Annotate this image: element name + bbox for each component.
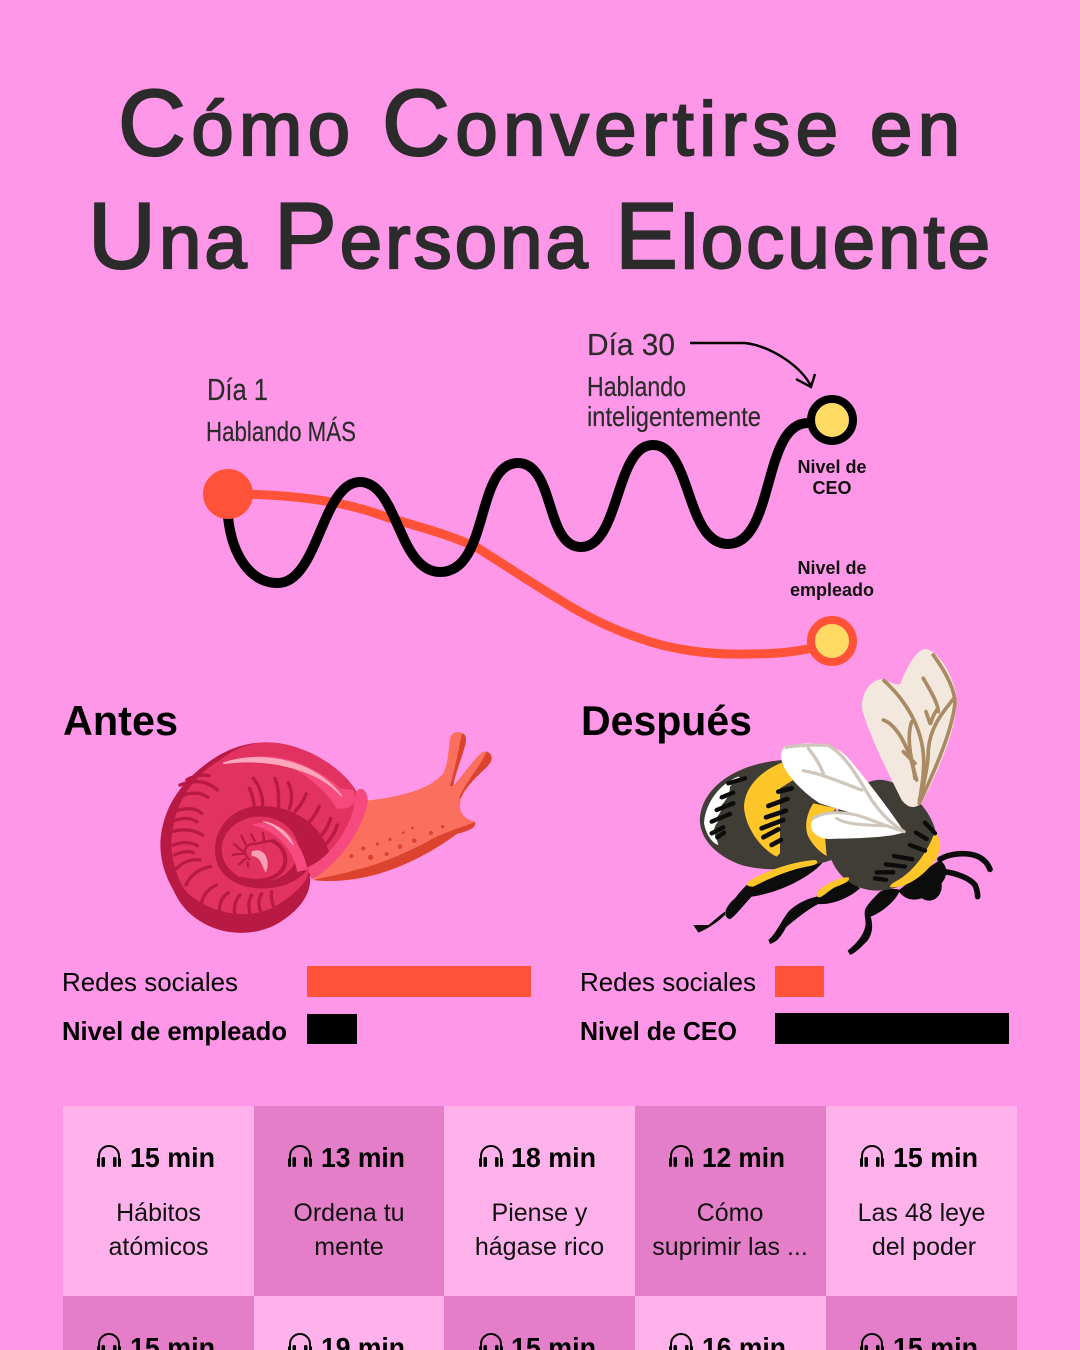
label: day 1: Hablando MÁS (206, 416, 356, 447)
arrow (690, 343, 815, 387)
bee tail marks (704, 777, 740, 845)
card: Cómo suprimir las ...: suprimir las ... (652, 1233, 808, 1261)
label: day 30: Día 30 (587, 327, 675, 362)
card: Ordena tu mente (254, 1106, 444, 1296)
line chart: progress from day 1 to day 30 (203, 343, 853, 662)
before: employee level label: Nivel de empleado (62, 1016, 287, 1046)
card row 2, column 4 (635, 1296, 826, 1350)
card: Ordena tu mente: 13 min (321, 1142, 405, 1173)
card: Cómo suprimir las ...: 12 min (702, 1142, 785, 1173)
card: Las 48 leye del poder (826, 1106, 1017, 1296)
label: employee level: Nivel de (797, 558, 867, 578)
label: employee level (790, 558, 874, 600)
card row 2, column 1 (63, 1296, 254, 1350)
card: Piense y hágase rico: 18 min (511, 1142, 596, 1173)
label: day 30 (587, 327, 761, 432)
label: day 30: Hablando (587, 371, 686, 402)
label: CEO level: CEO (812, 478, 852, 498)
after: social media bar (775, 966, 824, 997)
label: employee level: empleado (790, 580, 874, 600)
card: Las 48 leye del poder: del poder (872, 1233, 976, 1261)
card: Hábitos atómicos: Hábitos (116, 1199, 201, 1227)
before: employee level bar (307, 1014, 357, 1044)
heading: after: Después (581, 697, 752, 744)
title (88, 70, 990, 288)
bee yellow bands (744, 763, 793, 857)
bee back wing (862, 649, 957, 807)
card: Hábitos atómicos: atómicos (108, 1233, 209, 1261)
after: CEO level label: Nivel de CEO (580, 1016, 737, 1046)
card: Cómo suprimir las ... (635, 1106, 826, 1296)
snail body (313, 732, 492, 881)
before: social media bar (307, 966, 531, 997)
CEO level line (228, 423, 808, 583)
card: Ordena tu mente: Ordena tu (293, 1199, 405, 1227)
bee front wing (781, 743, 904, 839)
label: day 30: inteligentemente (587, 401, 761, 432)
snail shell (160, 742, 359, 933)
shell spiral (215, 806, 329, 888)
label: day 1: Día 1 (207, 372, 268, 407)
card: Hábitos atómicos: 15 min (130, 1142, 215, 1173)
card: Ordena tu mente: mente (314, 1233, 384, 1261)
label: CEO level (797, 457, 867, 498)
bee head and antennae (898, 860, 946, 901)
card row 2, column 5 (826, 1296, 1017, 1350)
card: Piense y hágase rico (444, 1106, 635, 1296)
after: CEO level bar (775, 1013, 1009, 1044)
bee thorax (828, 780, 937, 891)
start point (203, 469, 253, 519)
card: Las 48 leye del poder: 15 min (893, 1142, 978, 1173)
card row 2, column 2 (254, 1296, 444, 1350)
heading: before: Antes (63, 697, 178, 744)
icon: snail (160, 732, 492, 933)
employee end point (811, 620, 853, 662)
employee level line (228, 494, 812, 654)
title: Cómo Convertirse en (118, 70, 960, 175)
bee back legs (693, 862, 900, 955)
shell collar (308, 789, 368, 879)
label: day 1 (206, 372, 356, 447)
after: social media label: Redes sociales (580, 967, 756, 997)
label: CEO level: Nivel de (797, 457, 867, 477)
title: Una Persona Elocuente (88, 183, 990, 288)
CEO end point (811, 399, 853, 441)
before: social media label: Redes sociales (62, 967, 238, 997)
card: Cómo suprimir las ...: Cómo (697, 1199, 763, 1227)
book grid (63, 1106, 1017, 1350)
bee leg highlights (747, 860, 817, 887)
card: Hábitos atómicos (63, 1106, 254, 1296)
card: Las 48 leye del poder: Las 48 leye (858, 1199, 985, 1227)
card: Piense y hágase rico: Piense y (492, 1199, 588, 1227)
bee abdomen (700, 760, 837, 869)
shell ribs (171, 775, 337, 916)
card: Piense y hágase rico: hágase rico (475, 1233, 604, 1261)
card row 2, column 3 (444, 1296, 635, 1350)
icon: bee (693, 649, 990, 955)
